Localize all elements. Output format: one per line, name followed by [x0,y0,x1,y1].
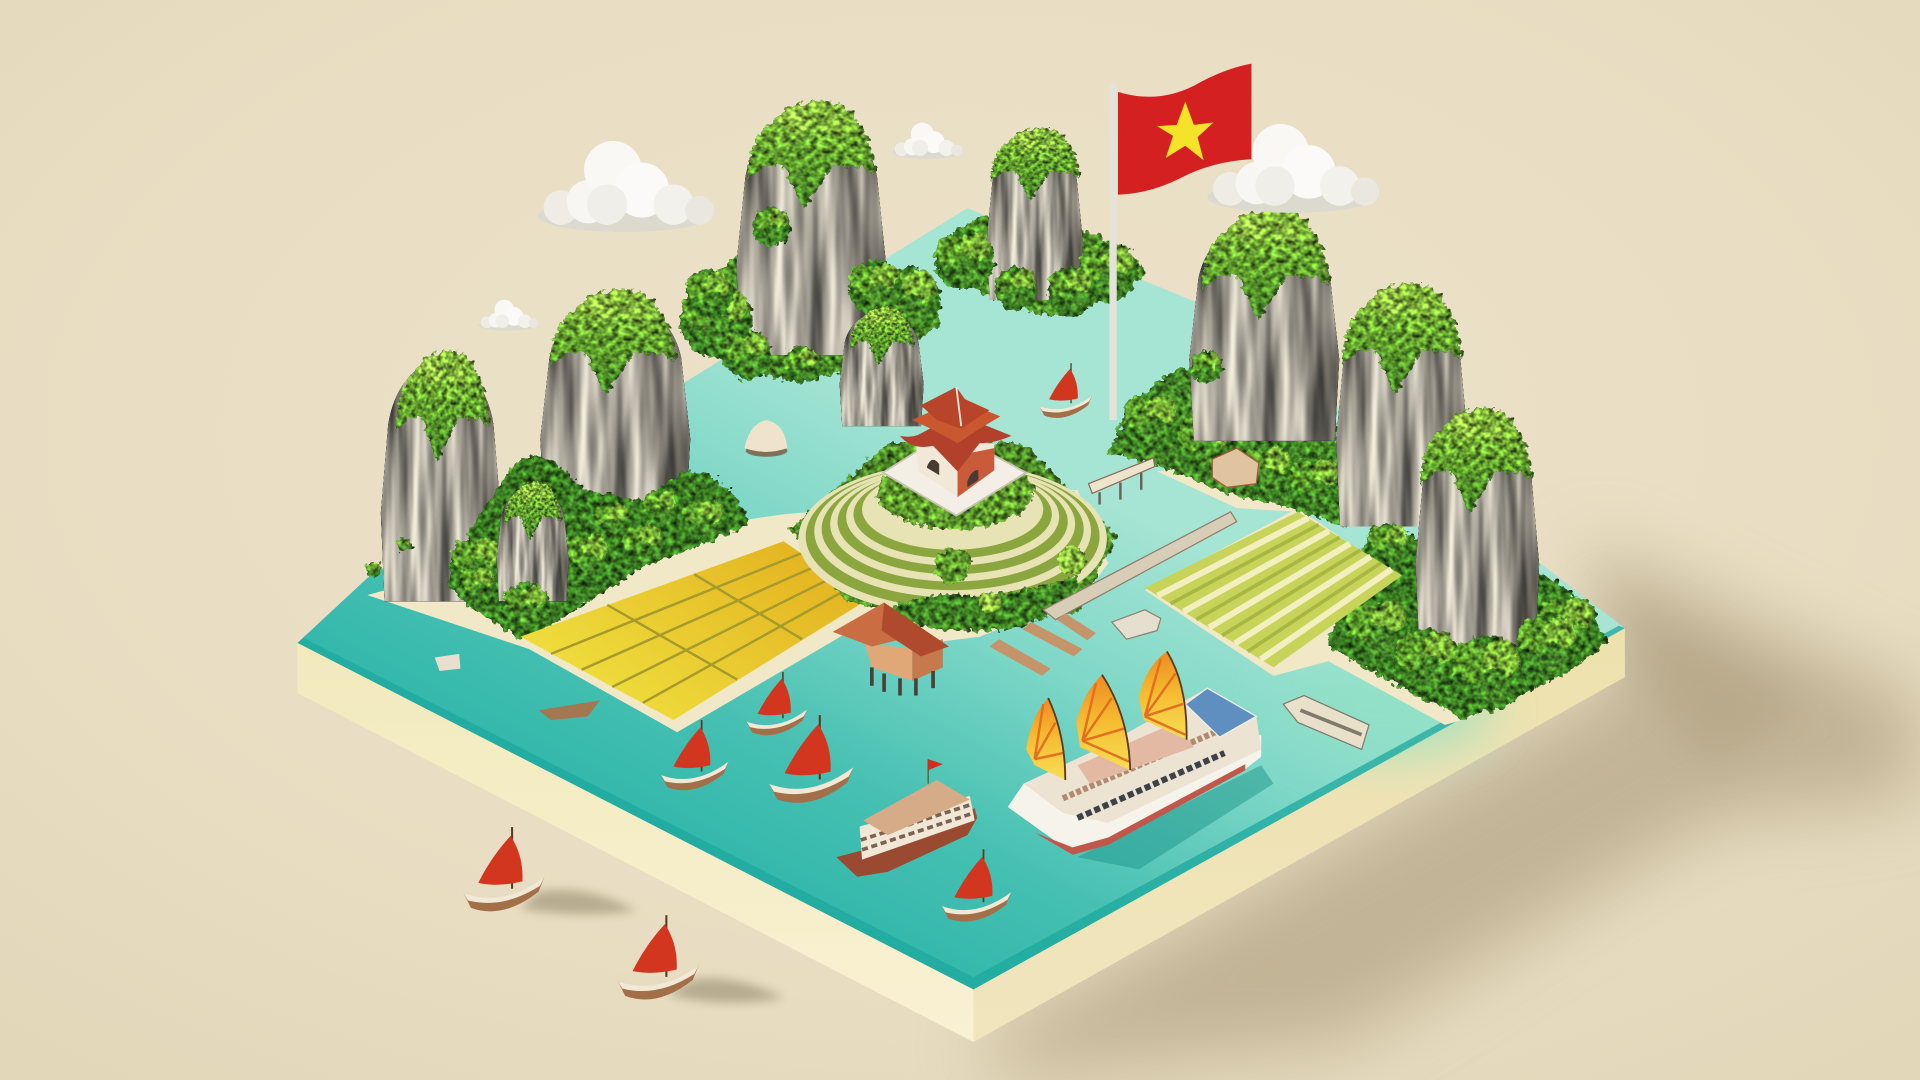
cruise ship with golden sails [1008,651,1273,869]
wooden cabin boat [836,759,977,877]
junks on sand [464,827,699,999]
temple walls [916,443,994,497]
flag cloth [1118,64,1251,195]
ship hull [1008,735,1261,853]
left foliage mass [447,457,747,639]
docks [989,613,1096,676]
long pier [1043,512,1237,620]
light shallows [1273,661,1494,759]
ship sails [1026,698,1065,780]
arched bridge [1089,458,1155,493]
platform right side [973,628,1625,1042]
temple platform [883,431,1026,516]
karst island: right group [1108,209,1607,719]
karst island: back left [680,101,941,384]
shore house [1212,448,1259,487]
right back foliage [1108,367,1347,527]
water edge rim [298,626,1625,989]
cloud: left [538,141,714,232]
ship water shadow [1078,765,1273,869]
cloud: behind flag [1207,124,1379,213]
ship roof [1185,688,1256,737]
red sail junks [435,654,1011,922]
flag star [1157,102,1213,160]
karst island: back centre [935,128,1145,316]
cloud: small left [479,300,539,331]
back centre foliage front [935,230,1138,316]
cloud: small top [892,123,963,159]
small karst: centre [840,307,924,426]
rice paddy field [520,541,867,720]
platform shadow [980,539,1920,1078]
junk shadows [520,890,784,1003]
isometric platform [298,208,1625,1042]
small boats in the back water [744,363,1092,457]
water surface [298,208,1625,989]
temple [883,387,1026,516]
flag pole [1109,83,1117,420]
hill foliage accents [877,456,1085,631]
stilt house [833,602,949,696]
shoreline sand [367,453,1476,732]
terraced rice field [1145,512,1402,667]
moored barges [1112,610,1369,749]
temple roofs [900,414,1011,471]
ship decks [1024,688,1261,823]
karst island: left group [365,290,747,639]
flag [1109,64,1251,420]
back centre foliage behind [937,214,1145,316]
terraced hill [790,443,1117,631]
platform left side [298,643,973,1042]
bridge and pier [989,458,1237,676]
